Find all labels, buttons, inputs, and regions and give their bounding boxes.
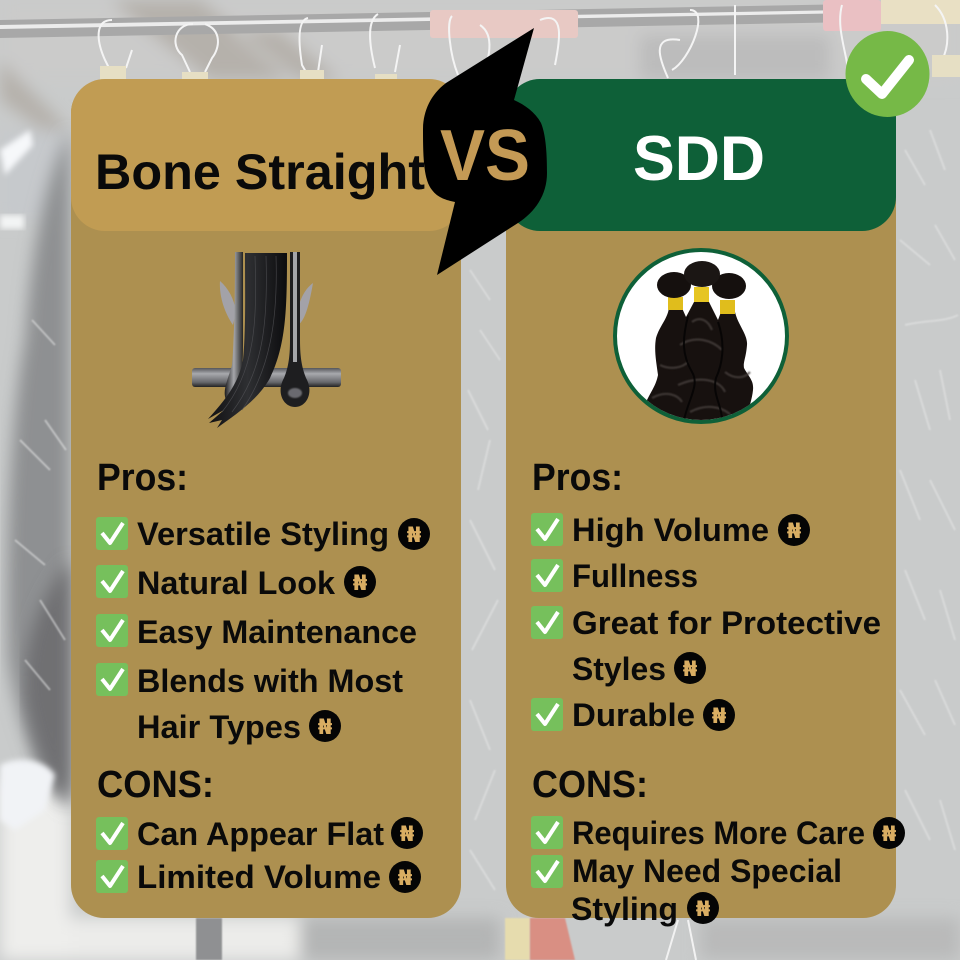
list: pros: Easy Maintenance — [137, 614, 417, 650]
hair strands — [15, 130, 958, 890]
list: pros: Natural Look — [137, 565, 335, 601]
list: cons — [96, 816, 423, 895]
list: pros: Hair Types — [137, 709, 301, 745]
list: pros: Styles — [572, 651, 666, 687]
heading: Pros: Pros: — [532, 457, 623, 499]
header: Bone Straight: Bone Straight — [95, 144, 425, 200]
list: cons: Can Appear Flat — [137, 816, 384, 852]
list: cons: ₦ — [882, 822, 897, 846]
list: pros: ₦ — [683, 657, 698, 681]
heading: Cons: CONS: — [97, 764, 214, 806]
list: pros: ₦ — [353, 571, 368, 595]
list: cons — [531, 815, 905, 927]
list: cons: Limited Volume — [137, 859, 381, 895]
icon: green check badge — [846, 31, 930, 117]
clothing rail — [0, 2, 960, 38]
heading: Cons: CONS: — [532, 764, 648, 806]
list: pros: Great for Protective — [572, 605, 881, 641]
header: SDD: SDD — [633, 124, 765, 194]
list: cons: ₦ — [400, 822, 415, 846]
list: cons: ₦ — [398, 866, 413, 890]
list: pros: ₦ — [318, 715, 333, 739]
icon: hair bundles in circle — [615, 250, 787, 425]
list: pros: Fullness — [572, 558, 698, 594]
VS lightning badge — [423, 28, 547, 275]
list: cons: ₦ — [696, 897, 711, 921]
panel: SDD — [506, 79, 905, 927]
list: pros — [531, 512, 881, 733]
list: cons: Requires More Care — [572, 815, 865, 851]
header: SDD — [506, 79, 896, 231]
list: cons: May Need Special — [572, 853, 842, 889]
list: pros: High Volume — [572, 512, 769, 548]
panel: Bone Straight — [71, 79, 463, 918]
list: pros: Versatile Styling — [137, 516, 389, 552]
icon: straight hair on rod — [192, 252, 341, 428]
VS lightning badge: VS — [440, 116, 530, 196]
heading: Pros: Pros: — [97, 457, 188, 499]
list: cons: Styling — [571, 891, 678, 927]
list: pros: ₦ — [787, 519, 802, 543]
pole and items at bottom — [196, 918, 222, 960]
list: pros: ₦ — [407, 523, 422, 547]
list: pros: Blends with Most — [137, 663, 403, 699]
list: pros — [96, 516, 430, 745]
list: pros: Durable — [572, 697, 695, 733]
header: Bone Straight — [71, 79, 463, 231]
left dark hair — [7, 130, 70, 810]
list: pros: ₦ — [712, 704, 727, 728]
